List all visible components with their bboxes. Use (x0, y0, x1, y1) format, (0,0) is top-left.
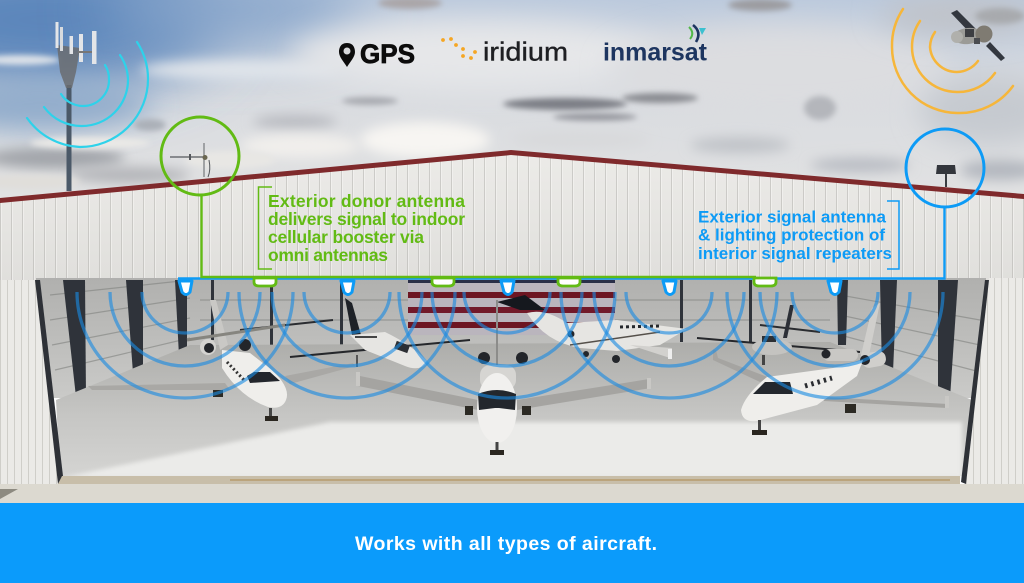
omni antenna icons (254, 278, 776, 286)
green bracket (258, 187, 272, 269)
aircraft: left foreground (88, 300, 355, 421)
hangar floor (56, 342, 972, 478)
aircraft: back right (697, 305, 860, 365)
text: exterior signal antenna (698, 208, 892, 263)
sky background (0, 0, 1024, 210)
green connector and donor antenna callout (161, 117, 756, 277)
footer text: Works with all types of aircraft. (355, 533, 657, 555)
text: exterior signal antenna: interior signal repeaters (698, 244, 892, 263)
cell tower (56, 22, 96, 191)
american flag (408, 280, 615, 335)
footer band (0, 503, 1024, 583)
aircraft: center foreground (356, 300, 651, 455)
ground apron (0, 476, 1024, 503)
interior signal waves (77, 292, 943, 398)
logo: iridium (441, 36, 568, 66)
blue bracket (887, 201, 899, 269)
left hangar door (0, 280, 63, 484)
right hangar door (961, 278, 1024, 484)
icon: exterior signal antenna (936, 165, 956, 187)
logo: GPS: GPS (360, 39, 415, 69)
text: exterior donor antenna: omni antennas (268, 245, 388, 265)
aircraft: back left (240, 298, 470, 368)
text: exterior donor antenna: delivers signal to indoor (268, 209, 465, 229)
hangar wall and roof (0, 150, 1024, 280)
logo: inmarsat: inmarsat (603, 38, 708, 66)
signal waves: cell tower (27, 42, 148, 147)
hangar interior back wall (36, 278, 986, 398)
logo: iridium: iridium (483, 36, 568, 66)
logo: inmarsat (603, 25, 708, 66)
text: exterior donor antenna: Exterior donor antenna (268, 191, 465, 211)
aircraft: back center (497, 295, 687, 363)
repeater icons (179, 281, 841, 294)
signal waves: satellite (892, 9, 1013, 113)
blue connector and exterior signal antenna callout (178, 129, 984, 278)
satellite (951, 10, 1005, 61)
icon: donor antenna (170, 143, 210, 177)
text: exterior signal antenna: Exterior signal antenna (698, 208, 887, 226)
text: exterior donor antenna (268, 191, 465, 265)
text: exterior donor antenna: cellular booster via (268, 227, 424, 247)
text: exterior signal antenna: & lighting protection of (698, 226, 885, 244)
aircraft: right foreground (713, 303, 949, 435)
